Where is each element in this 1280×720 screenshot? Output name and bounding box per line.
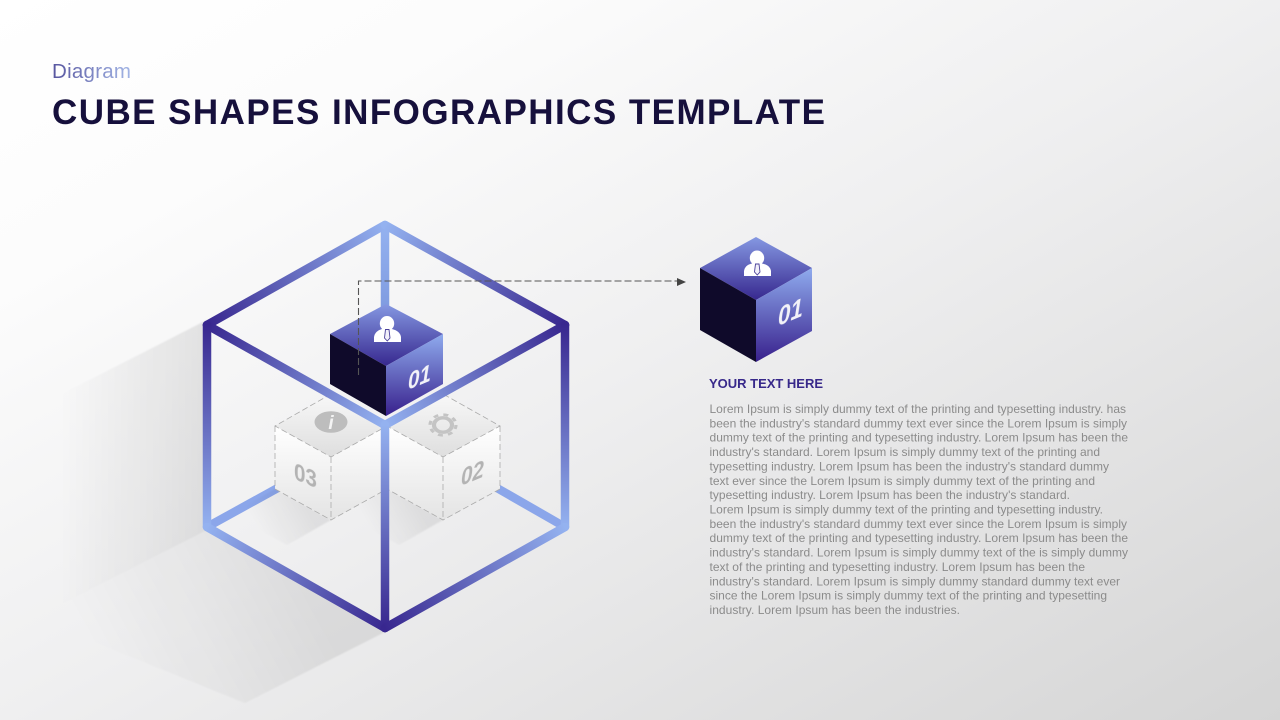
body text: text of the printing and typesetting industry. Lorem Ipsum has been the xyxy=(710,560,1085,574)
body text: industry's standard. Lorem Ipsum is simply dummy standard dummy text ever xyxy=(710,574,1120,588)
body text: dummy text of the printing and typesetting industry. Lorem Ipsum has been the xyxy=(710,531,1128,545)
icon: info: i xyxy=(328,413,334,434)
icon: gear xyxy=(430,415,456,435)
cube 01 inside frame xyxy=(330,304,443,416)
icon: person xyxy=(374,316,401,342)
body text: industry's standard. Lorem Ipsum is simply dummy text of the printing and xyxy=(710,445,1100,459)
title: CUBE SHAPES INFOGRAPHICS TEMPLATE xyxy=(52,93,825,132)
body text: been the industry's standard dummy text ever since the Lorem Ipsum is simply xyxy=(710,517,1127,531)
body text xyxy=(710,402,1128,617)
body text: industry's standard. Lorem Ipsum is simply dummy text of the is simply dummy xyxy=(710,546,1128,560)
back edges of wireframe cube xyxy=(207,225,565,527)
cube 01 detail xyxy=(700,237,812,362)
body text: been the industry's standard dummy text ever since the Lorem Ipsum is simply xyxy=(710,416,1127,430)
inner cube shadows xyxy=(231,489,443,545)
cube outer shadow xyxy=(35,320,385,703)
body text: dummy text of the printing and typesetting industry. Lorem Ipsum has been the xyxy=(710,431,1128,445)
number 01: 01 xyxy=(778,293,803,332)
text heading: YOUR TEXT HERE xyxy=(709,376,823,391)
body text: text ever since the Lorem Ipsum is simply dummy text of the printing and xyxy=(710,474,1095,488)
ghost cube 02 xyxy=(387,394,500,520)
body text: industry. Lorem Ipsum has been the industries. xyxy=(710,603,960,617)
body text: typesetting industry. Lorem Ipsum has been the industry's standard. xyxy=(710,488,1070,502)
body text: Lorem Ipsum is simply dummy text of the printing and typesetting industry. xyxy=(710,502,1103,516)
front edges of wireframe cube xyxy=(207,225,565,628)
body text: typesetting industry. Lorem Ipsum has been the industry's standard dummy xyxy=(710,459,1109,473)
ghost cube 03 xyxy=(275,394,387,520)
number 01: 01 xyxy=(408,359,431,395)
icon: person xyxy=(744,250,771,276)
dashed connector arrow xyxy=(358,278,686,375)
number 02: 02 xyxy=(461,455,484,491)
number 03: 03 xyxy=(294,457,317,494)
body text: Lorem Ipsum is simply dummy text of the printing and typesetting industry. has xyxy=(710,402,1126,416)
body text: since the Lorem Ipsum is simply dummy text of the printing and typesetting xyxy=(710,589,1107,603)
subtitle: Diagram xyxy=(52,60,131,83)
